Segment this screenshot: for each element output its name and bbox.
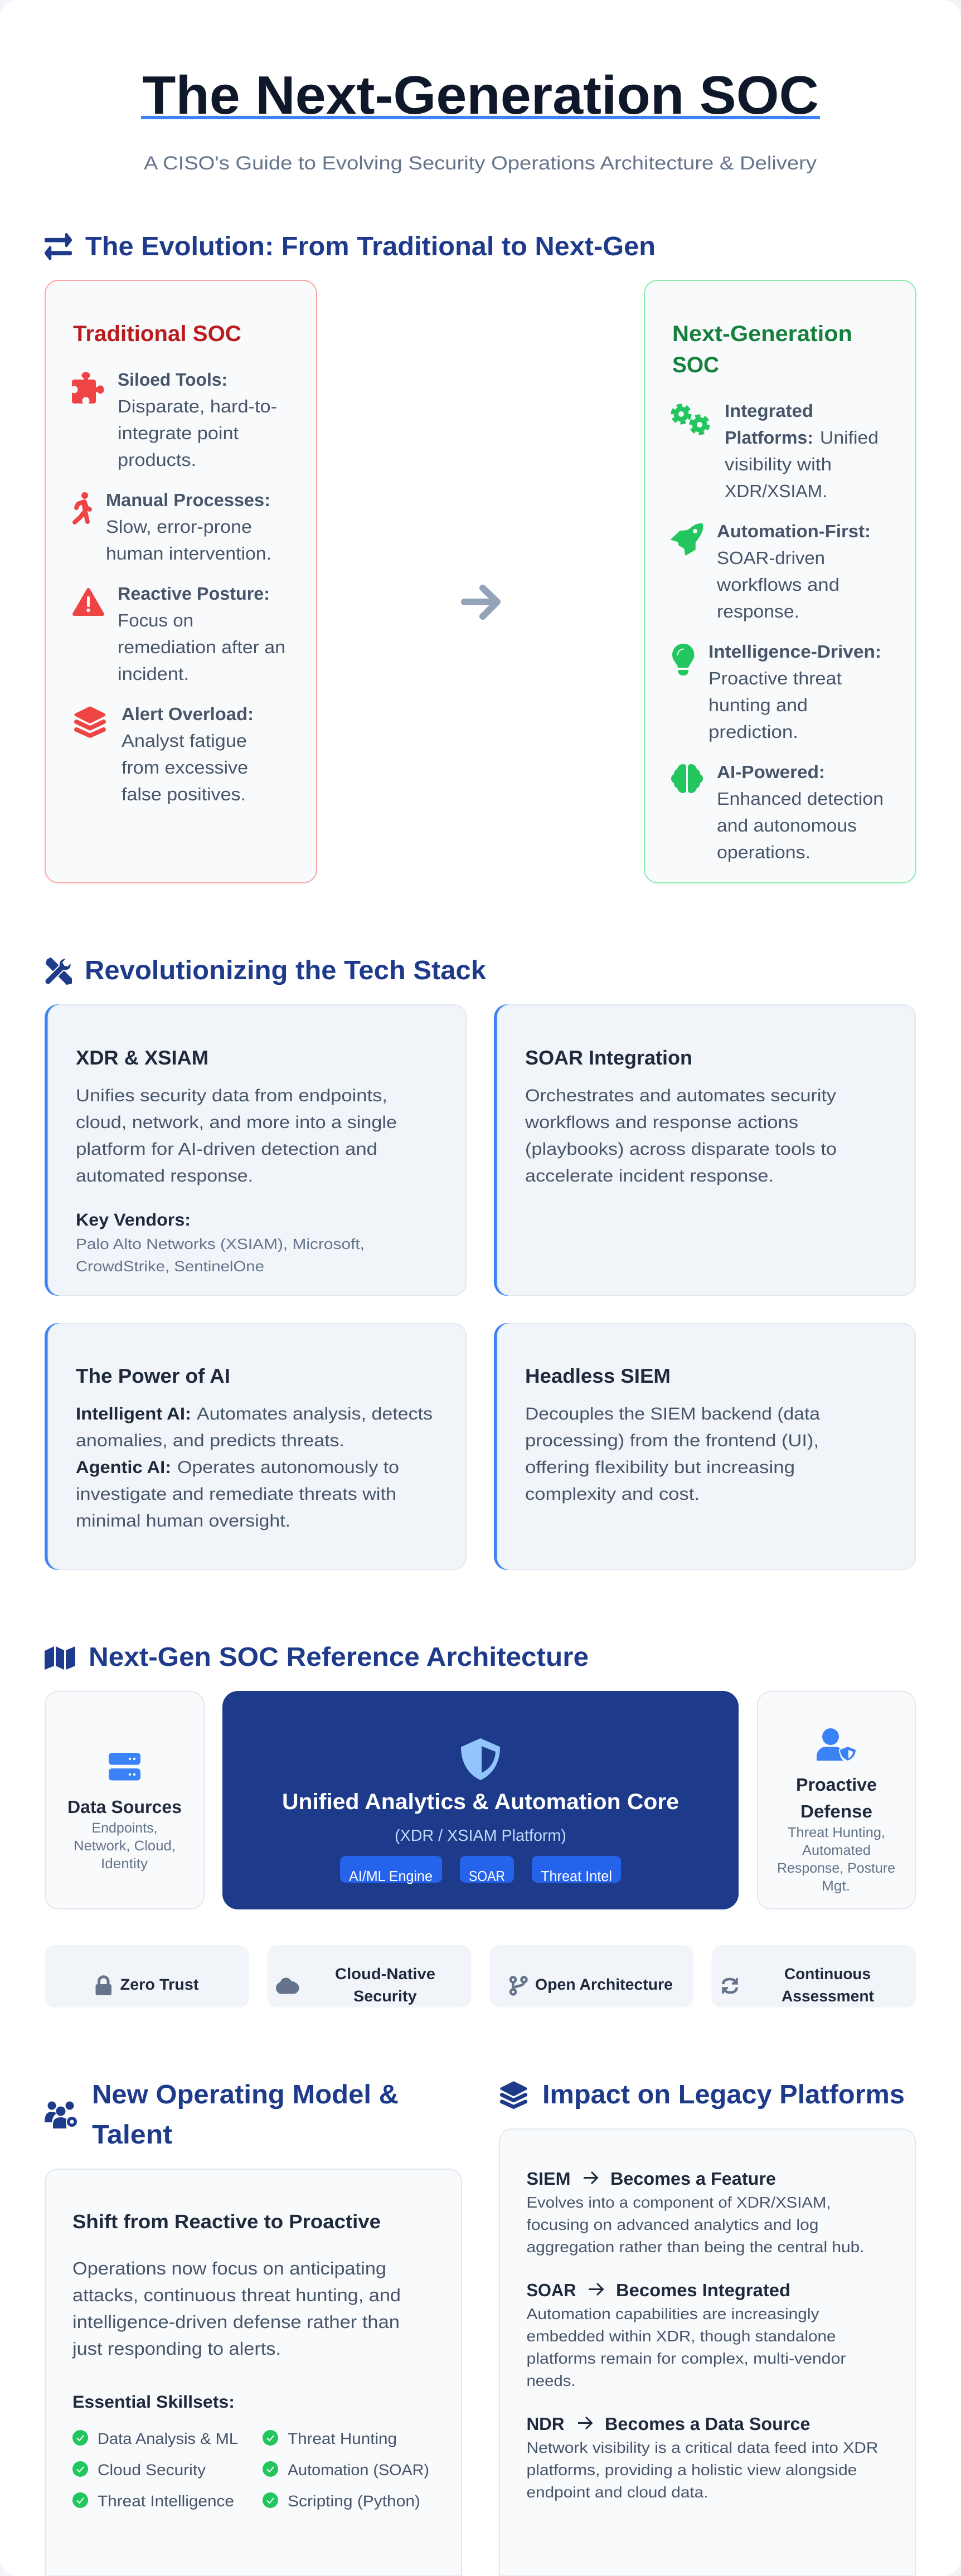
text: AI description: Intelligent AI: xyxy=(76,1404,191,1423)
panel: data sources xyxy=(45,1692,204,1909)
text: AI description: Automates analysis, detects xyxy=(197,1404,433,1423)
heading: headless SIEM: Headless SIEM xyxy=(525,1364,671,1387)
item: reactive posture xyxy=(118,584,285,684)
icon: layers xyxy=(501,2083,526,2107)
item: intelligence-driven xyxy=(708,641,881,742)
heading: operating model: New Operating Model & xyxy=(92,2080,399,2110)
text: key vendors: Palo Alto Networks (XSIAM), Microsoft, xyxy=(76,1236,365,1252)
heading: proactive defense: Proactive xyxy=(796,1775,877,1795)
principle: cloud-native security xyxy=(267,1945,472,2008)
panel: unified core xyxy=(222,1691,739,1909)
icon: server xyxy=(109,1753,140,1780)
heading: reference architecture: Next-Gen SOC Reference Architecture xyxy=(89,1642,589,1672)
icon: lock xyxy=(96,1977,111,1995)
item: SOAR xyxy=(526,2280,846,2389)
label: cloud-native security xyxy=(335,1965,435,2005)
text: headless SIEM description: offering flexibility but increasing xyxy=(525,1457,795,1477)
text: operations description: just responding to alerts. xyxy=(72,2339,281,2359)
text: proactive defense list xyxy=(777,1825,895,1894)
item: manual processes: Manual Processes: xyxy=(106,490,270,510)
item: SOAR: platforms remain for complex, multi-vendor xyxy=(526,2350,846,2367)
item: SIEM: SIEM xyxy=(526,2169,571,2189)
item: integrated platforms: Unified xyxy=(820,427,879,448)
heading: proactive defense: Defense xyxy=(800,1801,872,1821)
item: reactive posture: Focus on xyxy=(118,610,193,630)
item: alert overload xyxy=(122,704,254,804)
item: SOAR: embedded within XDR, though standalone xyxy=(526,2327,836,2345)
text: AI description xyxy=(76,1404,433,1530)
text: AI description: Agentic AI: xyxy=(76,1457,171,1477)
text: operations description: Operations now focus on anticipating xyxy=(72,2258,386,2278)
item: siloed tools: Disparate, hard-to- xyxy=(118,396,277,416)
item: SOAR: SOAR xyxy=(526,2280,576,2300)
subtitle: A CISO's Guide to Evolving Security Operations Architecture & Delivery xyxy=(144,153,817,174)
text: SOAR description xyxy=(525,1086,837,1185)
text: key vendors xyxy=(76,1210,365,1275)
text: key vendors: Key Vendors: xyxy=(76,1210,191,1229)
list: skillsets: Cloud Security xyxy=(98,2461,206,2478)
text: proactive defense list: Automated xyxy=(802,1843,871,1858)
text: data source list: Endpoints, xyxy=(91,1820,157,1836)
item: alert overload: Alert Overload: xyxy=(122,704,254,724)
text: proactive defense list: Threat Hunting, xyxy=(788,1825,885,1840)
icon: stacked layers xyxy=(76,708,104,736)
text: XDR description: cloud, network, and more into a single xyxy=(76,1112,397,1132)
item: integrated platforms xyxy=(725,401,879,501)
item: reactive posture: remediation after an xyxy=(118,637,285,657)
item: SIEM: Becomes a Feature xyxy=(610,2169,776,2189)
label: zero trust: Zero Trust xyxy=(120,1976,198,1993)
item: integrated platforms: visibility with xyxy=(725,454,832,474)
item: AI-powered xyxy=(717,762,884,862)
pill: SOAR: SOAR xyxy=(469,1868,505,1884)
text: proactive defense list: Mgt. xyxy=(822,1878,850,1894)
panel: proactive defense xyxy=(758,1692,915,1909)
item: intelligence-driven: hunting and xyxy=(708,695,808,715)
pill: threat intel xyxy=(532,1856,621,1884)
heading: SOAR integration: SOAR Integration xyxy=(525,1046,692,1069)
icon: exchange arrows xyxy=(45,233,72,260)
item: automation-first xyxy=(716,521,871,621)
item: SOAR: Automation capabilities are increasingly xyxy=(526,2305,819,2322)
heading: shift to proactive: Shift from Reactive to Proactive xyxy=(72,2211,381,2233)
item: siloed tools: integrate point xyxy=(118,423,239,443)
icon: warning triangle xyxy=(74,590,103,614)
item: siloed tools: Siloed Tools: xyxy=(118,370,227,390)
item: SOAR: needs. xyxy=(526,2372,575,2389)
list: skillsets: Automation (SOAR) xyxy=(288,2461,429,2478)
icon: gears xyxy=(672,406,708,434)
pill: threat intel: Threat Intel xyxy=(541,1868,612,1884)
icon: brain xyxy=(671,764,703,793)
icon: sync arrows xyxy=(723,1978,737,1994)
text: SOAR description: Orchestrates and automates security xyxy=(525,1086,837,1105)
heading: XDR and XSIAM: XDR & XSIAM xyxy=(76,1046,208,1069)
text: SOAR description: accelerate incident response. xyxy=(525,1166,774,1185)
item: SIEM: aggregation rather than being the central hub. xyxy=(526,2238,864,2256)
icon: users and gear xyxy=(45,2101,77,2128)
heading: essential skillsets: Essential Skillsets: xyxy=(72,2392,235,2412)
icon: rocket xyxy=(671,524,703,555)
item: NDR: NDR xyxy=(526,2414,564,2434)
item: siloed tools xyxy=(118,370,277,470)
item: alert overload: from excessive xyxy=(122,757,248,777)
section: tech stack xyxy=(45,956,916,1570)
item: NDR: platforms, providing a holistic view alongside xyxy=(526,2461,857,2478)
item: NDR: endpoint and cloud data. xyxy=(526,2483,708,2501)
item: SIEM: focusing on advanced analytics and log xyxy=(526,2216,818,2233)
item: manual processes: human intervention. xyxy=(106,543,271,563)
item: SOAR: Becomes Integrated xyxy=(616,2280,790,2300)
item: AI-powered: and autonomous xyxy=(717,815,857,835)
icon: map xyxy=(45,1646,75,1670)
heading: data sources: Data Sources xyxy=(67,1797,182,1817)
principle: open architecture xyxy=(489,1945,693,2008)
item: reactive posture: Reactive Posture: xyxy=(118,584,270,604)
label: open architecture: Open Architecture xyxy=(535,1976,673,1993)
item: manual processes xyxy=(106,490,271,563)
text: AI description: minimal human oversight. xyxy=(76,1511,290,1530)
heading: proactive defense xyxy=(796,1775,877,1821)
item: automation-first: Automation-First: xyxy=(717,521,871,541)
label: cloud-native security: Security xyxy=(353,1987,417,2005)
list: skillsets: Threat Intelligence xyxy=(98,2492,234,2510)
item: alert overload: Analyst fatigue xyxy=(122,731,247,751)
list: skillsets: Scripting (Python) xyxy=(288,2492,420,2510)
item: integrated platforms: XDR/XSIAM. xyxy=(725,481,827,501)
text: data source list xyxy=(74,1820,176,1872)
item: alert overload: false positives. xyxy=(122,784,246,804)
text: XDR description: platform for AI-driven detection and xyxy=(76,1139,377,1159)
text: headless SIEM description: Decouples the SIEM backend (data xyxy=(525,1404,821,1423)
item: intelligence-driven: Proactive threat xyxy=(708,668,842,688)
arrow: traditional to next-gen xyxy=(464,588,497,616)
text: AI description: investigate and remediate threats with xyxy=(76,1484,396,1504)
item: AI-powered: Enhanced detection xyxy=(717,789,884,809)
text: data source list: Identity xyxy=(101,1856,148,1872)
text: headless SIEM description: processing) from the frontend (UI), xyxy=(525,1431,819,1450)
icon: tools xyxy=(45,958,71,984)
text: SOAR description: (playbooks) across disparate tools to xyxy=(525,1139,837,1159)
item: intelligence-driven: prediction. xyxy=(708,722,798,742)
subtitle: platform: (XDR / XSIAM Platform) xyxy=(395,1827,566,1845)
section: operating model xyxy=(45,2080,462,2576)
item: automation-first: workflows and xyxy=(716,575,839,595)
item: NDR: Network visibility is a critical data feed into XDR xyxy=(526,2439,879,2456)
item: SIEM: Evolves into a component of XDR/XSIAM, xyxy=(526,2194,831,2211)
pill: AI/ML engine xyxy=(340,1856,442,1884)
text: AI description: Operates autonomously to xyxy=(177,1457,399,1477)
list: skillsets xyxy=(72,2430,429,2510)
label: cloud-native security: Cloud-Native xyxy=(335,1965,435,1982)
panel: shift to proactive xyxy=(45,2169,462,2576)
icon: code branch xyxy=(511,1977,526,1994)
text: operations description: attacks, continuous threat hunting, and xyxy=(72,2285,401,2305)
text: SOAR description: workflows and response actions xyxy=(525,1112,798,1132)
heading: traditional SOC: Traditional SOC xyxy=(73,322,241,346)
item: AI-powered: AI-Powered: xyxy=(717,762,825,782)
item: reactive posture: incident. xyxy=(118,664,189,684)
text: operations description xyxy=(72,2258,401,2359)
item: integrated platforms: Platforms: xyxy=(725,427,813,448)
text: proactive defense list: Response, Posture xyxy=(777,1860,895,1876)
card: headless SIEM xyxy=(494,1323,916,1570)
heading: unified core: Unified Analytics & Automation Core xyxy=(282,1790,679,1814)
label: continuous assessment xyxy=(782,1965,874,2005)
icon: shield xyxy=(462,1739,499,1780)
pill: SOAR xyxy=(460,1856,514,1884)
section: evolution xyxy=(45,232,916,883)
section: reference architecture xyxy=(45,1642,916,2008)
text: XDR description: Unifies security data from endpoints, xyxy=(76,1086,387,1105)
heading: next-generation SOC: Next-Generation xyxy=(672,322,852,346)
label: continuous assessment: Assessment xyxy=(782,1987,874,2005)
principle: zero trust xyxy=(45,1945,249,2008)
text: XDR description xyxy=(76,1086,397,1185)
heading: evolution: The Evolution: From Traditional to Next-Gen xyxy=(85,232,656,261)
heading: operating model: Talent xyxy=(92,2120,172,2150)
heading: next-generation SOC: SOC xyxy=(672,353,719,377)
card: power of AI xyxy=(45,1323,467,1570)
pill: AI/ML engine: AI/ML Engine xyxy=(349,1868,433,1884)
panel: legacy platforms xyxy=(499,2129,915,2576)
text: AI description: anomalies, and predicts threats. xyxy=(76,1431,344,1450)
principle: continuous assessment xyxy=(711,1945,916,2008)
item: NDR: Becomes a Data Source xyxy=(605,2414,810,2434)
text: XDR description: automated response. xyxy=(76,1166,253,1185)
item: intelligence-driven: Intelligence-Driven: xyxy=(708,641,881,662)
icon: user shield xyxy=(817,1728,856,1761)
item: SIEM xyxy=(526,2169,864,2256)
heading: tech stack: Revolutionizing the Tech Stack xyxy=(85,956,486,985)
card: SOAR integration xyxy=(494,1004,916,1296)
heading: power of AI: The Power of AI xyxy=(76,1364,230,1387)
panel: next-generation SOC xyxy=(644,280,916,883)
item: automation-first: SOAR-driven xyxy=(717,548,825,568)
icon: light bulb xyxy=(672,644,695,675)
item: siloed tools: products. xyxy=(118,450,196,470)
section: legacy impact xyxy=(499,2080,915,2576)
title: The Next-Generation SOC xyxy=(142,65,819,125)
heading: next-generation SOC xyxy=(672,322,852,377)
panel: traditional SOC xyxy=(45,280,317,883)
heading: operating model xyxy=(92,2080,399,2150)
text: headless SIEM description: complexity and cost. xyxy=(525,1484,700,1504)
text: operations description: intelligence-driven defense rather than xyxy=(72,2312,400,2332)
card: XDR and XSIAM xyxy=(45,1004,467,1296)
item: AI-powered: operations. xyxy=(717,842,810,862)
item: integrated platforms: Integrated xyxy=(725,401,813,421)
text: data source list: Network, Cloud, xyxy=(74,1838,176,1854)
item: automation-first: response. xyxy=(717,601,799,621)
text: headless SIEM description xyxy=(525,1404,821,1504)
icon: walking person xyxy=(75,492,90,522)
item: NDR xyxy=(526,2414,879,2501)
text: key vendors: CrowdStrike, SentinelOne xyxy=(76,1258,264,1275)
icon: puzzle piece xyxy=(70,372,104,405)
list: skillsets: Data Analysis & ML xyxy=(98,2430,238,2447)
list: skillsets: Threat Hunting xyxy=(288,2430,397,2447)
heading: legacy impact: Impact on Legacy Platforms xyxy=(542,2080,905,2110)
icon: cloud xyxy=(276,1977,299,1994)
item: manual processes: Slow, error-prone xyxy=(106,517,252,537)
label: continuous assessment: Continuous xyxy=(784,1965,871,1982)
